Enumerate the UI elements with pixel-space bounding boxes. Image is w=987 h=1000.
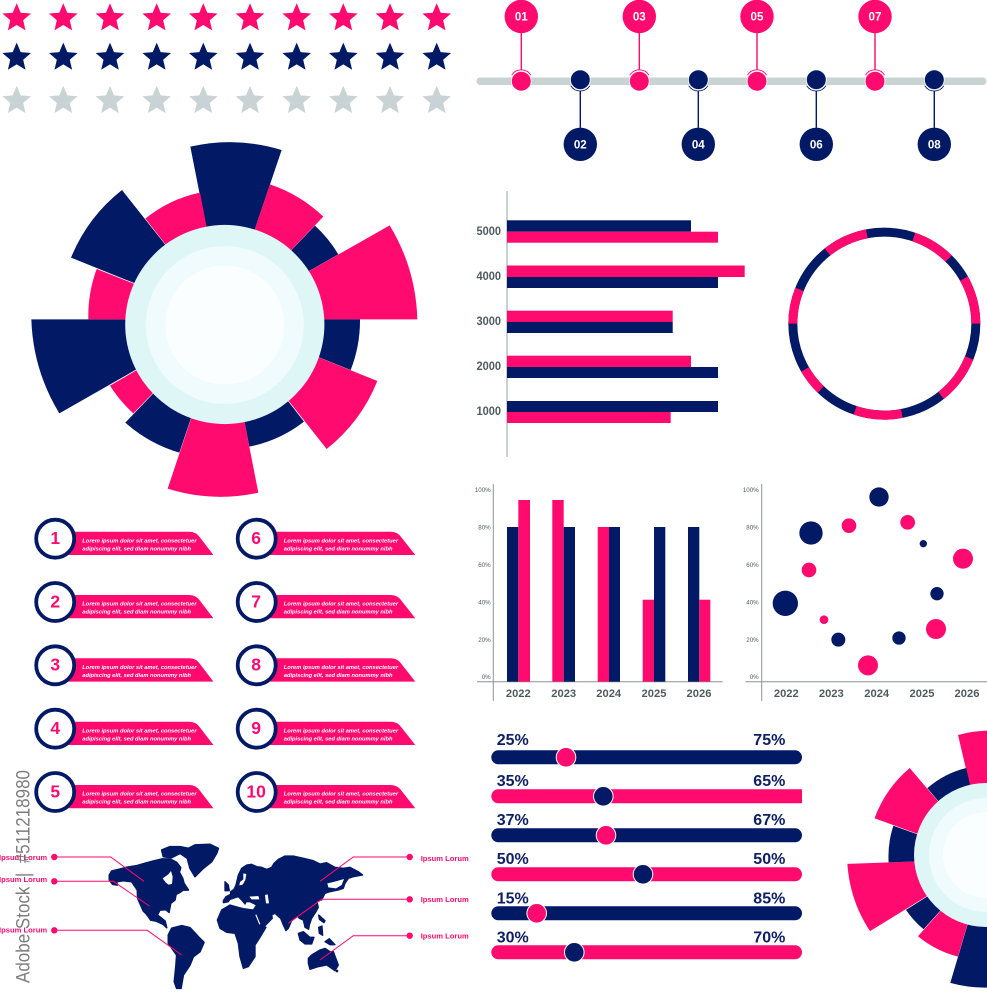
slider 50/50 — [491, 851, 802, 884]
timeline node 05 — [740, 0, 774, 91]
list item 8 — [238, 646, 415, 684]
callout russia — [320, 854, 469, 881]
cropped wheel centre disc — [914, 783, 987, 927]
timeline node 08: 08 — [928, 138, 941, 151]
callout russia: Ipsum Lorum — [421, 854, 469, 863]
columns 2023: 2023 — [551, 688, 576, 700]
column chart percent axis: 100% — [475, 487, 491, 494]
callout north america 1: Ipsum Lorum — [0, 853, 47, 862]
slider 30/70: 70% — [753, 930, 785, 946]
bubble chart percent axis: 0% — [750, 674, 759, 681]
list item 9: Lorem ipsum dolor sit amet, consectetuer — [284, 728, 399, 734]
slider 35/65: 35% — [497, 773, 529, 790]
list item 2 — [36, 583, 213, 621]
timeline node 04: 04 — [692, 138, 705, 151]
slider 30/70: 30% — [497, 930, 529, 946]
slider 50/50: 50% — [753, 851, 785, 868]
bubble chart percent axis: 40% — [746, 600, 759, 607]
list item 1 — [36, 520, 213, 558]
bars 3000: 3000 — [476, 314, 501, 328]
timeline node 06: 06 — [810, 138, 823, 151]
list item 5 — [36, 773, 213, 811]
list item 9: 9 — [251, 718, 261, 738]
list item 3 — [36, 646, 213, 684]
horizontal bar chart — [476, 191, 745, 457]
list item 7: Lorem ipsum dolor sit amet, consectetuer — [284, 602, 399, 608]
bars 3000 — [476, 311, 673, 333]
slider 35/65: 65% — [753, 773, 785, 790]
bubble chart percent axis: 20% — [746, 637, 759, 644]
list item 4 — [36, 710, 213, 748]
eurasia, africa, australia — [217, 856, 363, 972]
bars 4000: 4000 — [476, 269, 501, 283]
list item 6 — [238, 520, 415, 558]
vertical stock id text: Adobe Stock | #511218980 — [12, 770, 34, 983]
bars 5000 — [476, 220, 718, 243]
bubble chart year axis: 2023 — [819, 688, 844, 700]
slider 25/75: 25% — [497, 732, 529, 749]
slider 30/70 — [491, 930, 802, 962]
world map — [0, 844, 469, 988]
slider 37/67 — [491, 812, 802, 845]
list item 1: adipiscing elit, sed diam nonummy nibh — [82, 546, 192, 552]
slider 35/65 — [491, 773, 802, 806]
navy stars row — [2, 43, 451, 70]
slider 15/85: 15% — [497, 890, 529, 907]
list item 2: adipiscing elit, sed diam nonummy nibh — [82, 610, 192, 616]
list item 6: adipiscing elit, sed diam nonummy nibh — [284, 546, 393, 552]
column chart 2022-2026 — [475, 484, 723, 701]
slider 25/75 — [491, 732, 802, 767]
bars 4000 — [476, 266, 745, 288]
numbered list column 1 — [36, 520, 213, 811]
list item 10: 10 — [246, 781, 266, 801]
list item 8: 8 — [251, 655, 261, 675]
bubble chart percent axis — [743, 487, 759, 681]
list item 10: adipiscing elit, sed diam nonummy nibh — [284, 800, 393, 806]
segmented donut ring — [793, 232, 976, 415]
timeline node 07 — [858, 0, 892, 91]
bubble chart percent axis: 60% — [746, 562, 759, 569]
list item 8: adipiscing elit, sed diam nonummy nibh — [284, 673, 393, 679]
list item 4: adipiscing elit, sed diam nonummy nibh — [82, 736, 192, 742]
list item 5: adipiscing elit, sed diam nonummy nibh — [82, 800, 192, 806]
callout asia — [288, 895, 469, 923]
list item 1: 1 — [50, 528, 60, 548]
map leader lines and labels — [0, 853, 469, 960]
callout asia: Ipsum Lorum — [421, 895, 469, 904]
timeline node 08 — [918, 70, 951, 161]
bubbles — [773, 487, 973, 675]
bubble chart year axis — [774, 688, 979, 700]
bars 1000 — [476, 401, 718, 423]
radial wheel chart cropped bottom right — [843, 726, 987, 992]
star rating rows — [2, 3, 451, 113]
list item 3: 3 — [50, 655, 60, 675]
list item 5: 5 — [50, 781, 60, 801]
list item 6: 6 — [251, 528, 261, 548]
slider 15/85 — [491, 890, 802, 923]
bars 1000: 1000 — [476, 404, 501, 418]
columns 2024 — [596, 527, 622, 700]
radial wheel chart large — [31, 142, 417, 497]
bubble chart year axis: 2025 — [910, 688, 934, 700]
timeline node 03: 03 — [633, 11, 646, 24]
bars 2000: 2000 — [476, 359, 501, 373]
list item 8: Lorem ipsum dolor sit amet, consectetuer — [284, 665, 399, 671]
columns 2026 — [687, 527, 711, 700]
grey stars row — [2, 86, 451, 113]
timeline node 07: 07 — [869, 11, 881, 24]
timeline node 06 — [800, 70, 833, 161]
column chart percent axis: 0% — [482, 674, 491, 681]
timeline node 02: 02 — [574, 138, 587, 151]
timeline 01-08 — [476, 0, 986, 161]
numbered list column 2 — [238, 520, 415, 811]
list item 10 — [238, 773, 415, 811]
pink stars row — [2, 3, 451, 30]
callout north america 2: Ipsum Lorum — [0, 875, 47, 884]
timeline node 01: 01 — [515, 11, 528, 24]
callout australia: Ipsum Lorum — [421, 932, 469, 940]
column chart percent axis — [475, 487, 491, 681]
columns 2025 — [642, 527, 666, 700]
list item 4: Lorem ipsum dolor sit amet, consectetuer — [82, 728, 197, 734]
list item 2: 2 — [50, 591, 60, 611]
list item 7: adipiscing elit, sed diam nonummy nibh — [284, 610, 393, 616]
columns 2026: 2026 — [687, 688, 711, 700]
callout south america: Ipsum Lorum — [0, 926, 47, 934]
percentage sliders — [491, 732, 802, 962]
columns 2025: 2025 — [642, 688, 666, 700]
bubble chart percent axis: 100% — [743, 487, 759, 494]
column chart percent axis: 40% — [478, 600, 491, 607]
wheel centre disc — [125, 225, 324, 424]
timeline node 03 — [623, 0, 656, 91]
slider 50/50: 50% — [497, 851, 529, 868]
column chart percent axis: 80% — [478, 525, 491, 532]
list item 1: Lorem ipsum dolor sit amet, consectetuer — [82, 538, 197, 544]
columns 2022 — [506, 500, 531, 700]
list item 4: 4 — [50, 718, 60, 738]
callout north america 1 — [0, 853, 144, 881]
list item 3: adipiscing elit, sed diam nonummy nibh — [82, 673, 192, 679]
column chart percent axis: 20% — [478, 637, 491, 644]
slider 37/67: 37% — [497, 812, 529, 829]
list item 3: Lorem ipsum dolor sit amet, consectetuer — [82, 665, 197, 671]
callout north america 2 — [0, 875, 149, 906]
timeline node 01 — [505, 0, 538, 91]
bubble chart year axis: 2026 — [955, 688, 979, 700]
callout australia — [320, 932, 469, 960]
list item 9: adipiscing elit, sed diam nonummy nibh — [284, 736, 393, 742]
bubble chart 2022-2026 — [743, 484, 987, 701]
slider 37/67: 67% — [753, 812, 785, 829]
list item 7: 7 — [251, 591, 261, 611]
bubble chart percent axis: 80% — [746, 525, 759, 532]
column chart percent axis: 60% — [478, 562, 491, 569]
columns 2024: 2024 — [596, 688, 622, 700]
bars 5000: 5000 — [476, 224, 501, 238]
bubble chart year axis: 2022 — [774, 688, 799, 700]
americas and greenland — [109, 844, 218, 988]
list item 9 — [238, 710, 415, 748]
list item 10: Lorem ipsum dolor sit amet, consectetuer — [284, 792, 399, 798]
slider 25/75: 75% — [753, 732, 785, 749]
timeline node 04 — [682, 70, 715, 161]
columns 2023 — [551, 500, 576, 700]
slider 15/85: 85% — [753, 890, 785, 907]
list item 7 — [238, 583, 415, 621]
list item 2: Lorem ipsum dolor sit amet, consectetuer — [82, 602, 197, 608]
list item 5: Lorem ipsum dolor sit amet, consectetuer — [82, 792, 197, 798]
callout south america — [0, 926, 182, 955]
bubble chart year axis: 2024 — [864, 688, 890, 700]
timeline node 05: 05 — [751, 11, 764, 24]
timeline node 02 — [564, 70, 597, 161]
columns 2022: 2022 — [506, 688, 531, 700]
list item 6: Lorem ipsum dolor sit amet, consectetuer — [284, 538, 399, 544]
bars 2000 — [476, 356, 718, 378]
